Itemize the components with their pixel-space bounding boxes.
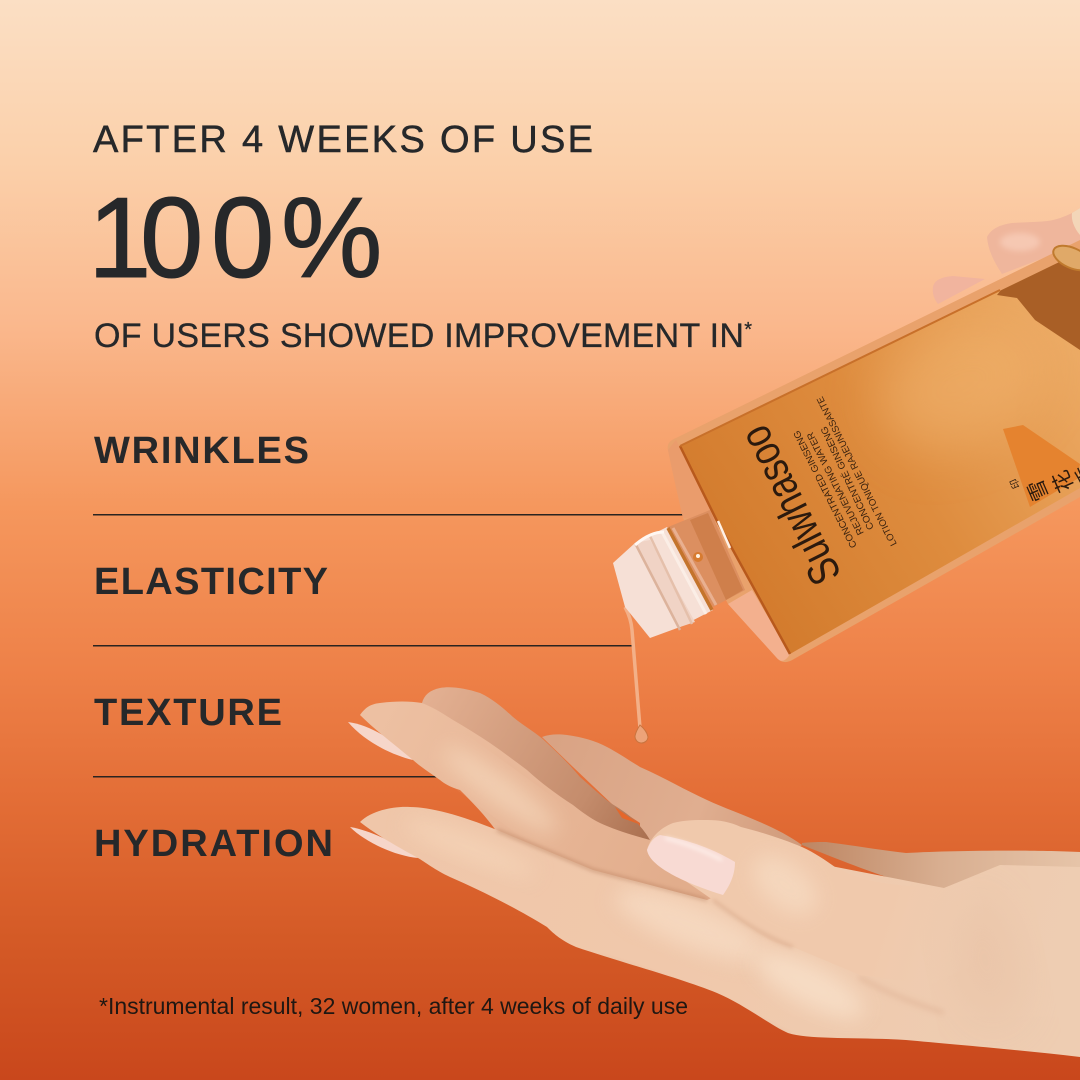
product name on label: LOTION TONIQUE RAJEUNISSANTE — [815, 394, 900, 548]
middle finger nail — [348, 722, 413, 760]
list item: wrinkles: WRINKLES — [94, 430, 309, 472]
hand — [348, 687, 1080, 1057]
index finger nail — [350, 827, 418, 858]
thumb nail highlight — [665, 838, 722, 860]
list item: texture: TEXTURE — [94, 692, 282, 734]
little finger — [542, 734, 802, 880]
product name on label: CONCENTRÉ GINSENG — [819, 424, 877, 531]
divider 1 — [93, 514, 683, 516]
bottle neck — [668, 510, 745, 607]
wrist back — [802, 842, 1080, 892]
list item: hydration: HYDRATION — [94, 823, 333, 865]
thumb — [647, 820, 987, 985]
ring cap of bottle base — [1050, 241, 1080, 275]
hand highlights and shading — [436, 834, 942, 1020]
fingers holding the bottle — [933, 208, 1080, 304]
oil drip and droplet — [625, 607, 648, 743]
thumb nail — [647, 835, 735, 895]
thumb crease shading — [713, 900, 793, 947]
brand name on label: Sulwhasoo — [730, 418, 851, 593]
liquid — [680, 252, 1080, 654]
subheading: of users showed improvement in: * — [744, 319, 752, 341]
heading: after 4 weeks of use: AFTER 4 WEEKS OF USE — [93, 119, 593, 161]
list item: elasticity: ELASTICITY — [94, 561, 328, 603]
big number: 100%: 100% — [88, 175, 382, 302]
divider 2 — [93, 645, 632, 646]
gap between fingers showing background — [615, 807, 639, 824]
middle finger — [360, 702, 720, 905]
index finger and back of hand — [360, 807, 1080, 1057]
hanja logo on label: 花 — [1049, 467, 1079, 495]
thumb highlight — [742, 844, 828, 926]
bottle cap — [613, 527, 713, 638]
middle finger highlight — [435, 738, 565, 842]
hanja logo on label: 雪 — [1024, 476, 1054, 504]
subheading: of users showed improvement in: OF USERS SHOWED IMPROVEMENT IN — [94, 317, 744, 355]
divider 3 — [93, 776, 438, 778]
crease between index and middle finger — [497, 830, 707, 900]
footnote: *Instrumental result, 32 women, after 4 weeks of daily use — [99, 993, 688, 1019]
bottle — [613, 240, 1080, 662]
product name on label: REJUVENATING WATER — [805, 430, 867, 537]
bottle glass body — [668, 240, 1080, 662]
hanja logo on label: 印 — [1008, 477, 1023, 491]
product name on label: CONCENTRATED GINSENG — [792, 428, 860, 550]
hanja logo on label — [1008, 460, 1080, 504]
ring finger — [422, 687, 650, 840]
